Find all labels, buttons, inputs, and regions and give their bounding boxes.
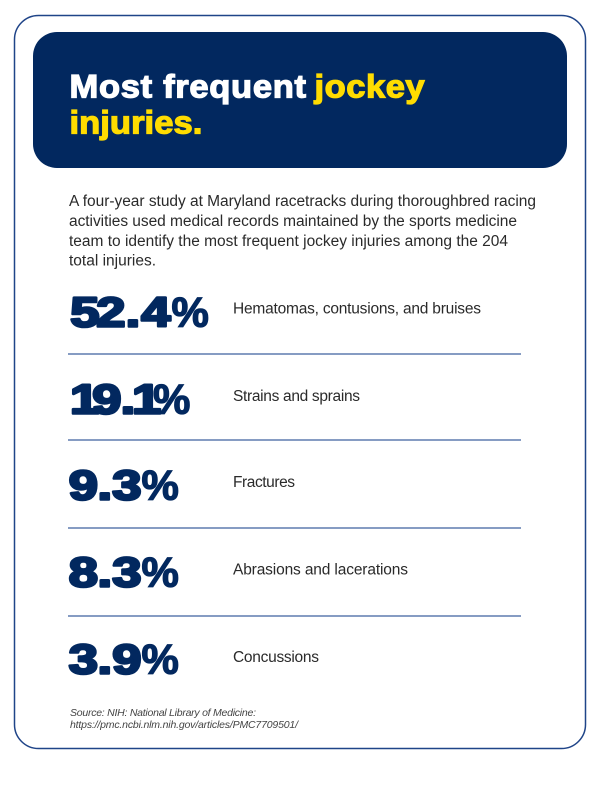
source note: https://pmc.ncbi.nlm.nih.gov/articles/PMC7709501/ (70, 719, 299, 731)
source note: Source: NIH: National Library of Medicine: (70, 707, 256, 719)
stat: concussions (69, 636, 319, 683)
stat: abrasions (69, 548, 408, 596)
stat: strains: 19.1 (70, 376, 161, 423)
source note (70, 707, 299, 731)
intro text: A four-year study at Maryland racetracks during thoroughbred racing (69, 193, 536, 210)
stat: abrasions: % (142, 548, 179, 596)
heading: Most frequent (70, 70, 306, 105)
stat: fractures: Fractures (233, 474, 295, 491)
intro text (69, 193, 536, 270)
stat: strains: Strains and sprains (233, 388, 360, 405)
heading: jockey (313, 70, 425, 105)
stat: abrasions: 8.3 (69, 549, 141, 596)
heading: injuries. (70, 106, 202, 141)
stat: fractures (69, 462, 295, 509)
intro text: team to identify the most frequent jockey injuries among the 204 (69, 233, 508, 250)
stat: hematomas (70, 288, 481, 336)
stat: abrasions: Abrasions and lacerations (233, 562, 408, 578)
stat: fractures: 9.3 (69, 462, 141, 509)
stat: hematomas: 52.4 (70, 289, 171, 336)
stat: hematomas: Hematomas, contusions, and bruises (233, 300, 481, 318)
heading (70, 70, 425, 141)
stat: concussions: % (142, 636, 179, 682)
stat: strains: % (153, 376, 190, 422)
stat: strains (70, 376, 360, 423)
stat: concussions: Concussions (233, 649, 319, 666)
panel: title banner (33, 32, 567, 168)
stat: fractures: % (142, 462, 179, 508)
stat: hematomas: % (172, 288, 209, 336)
stat: concussions: 3.9 (69, 636, 141, 683)
intro text: activities used medical records maintained by the sports medicine (69, 213, 517, 230)
intro text: total injuries. (69, 252, 156, 270)
